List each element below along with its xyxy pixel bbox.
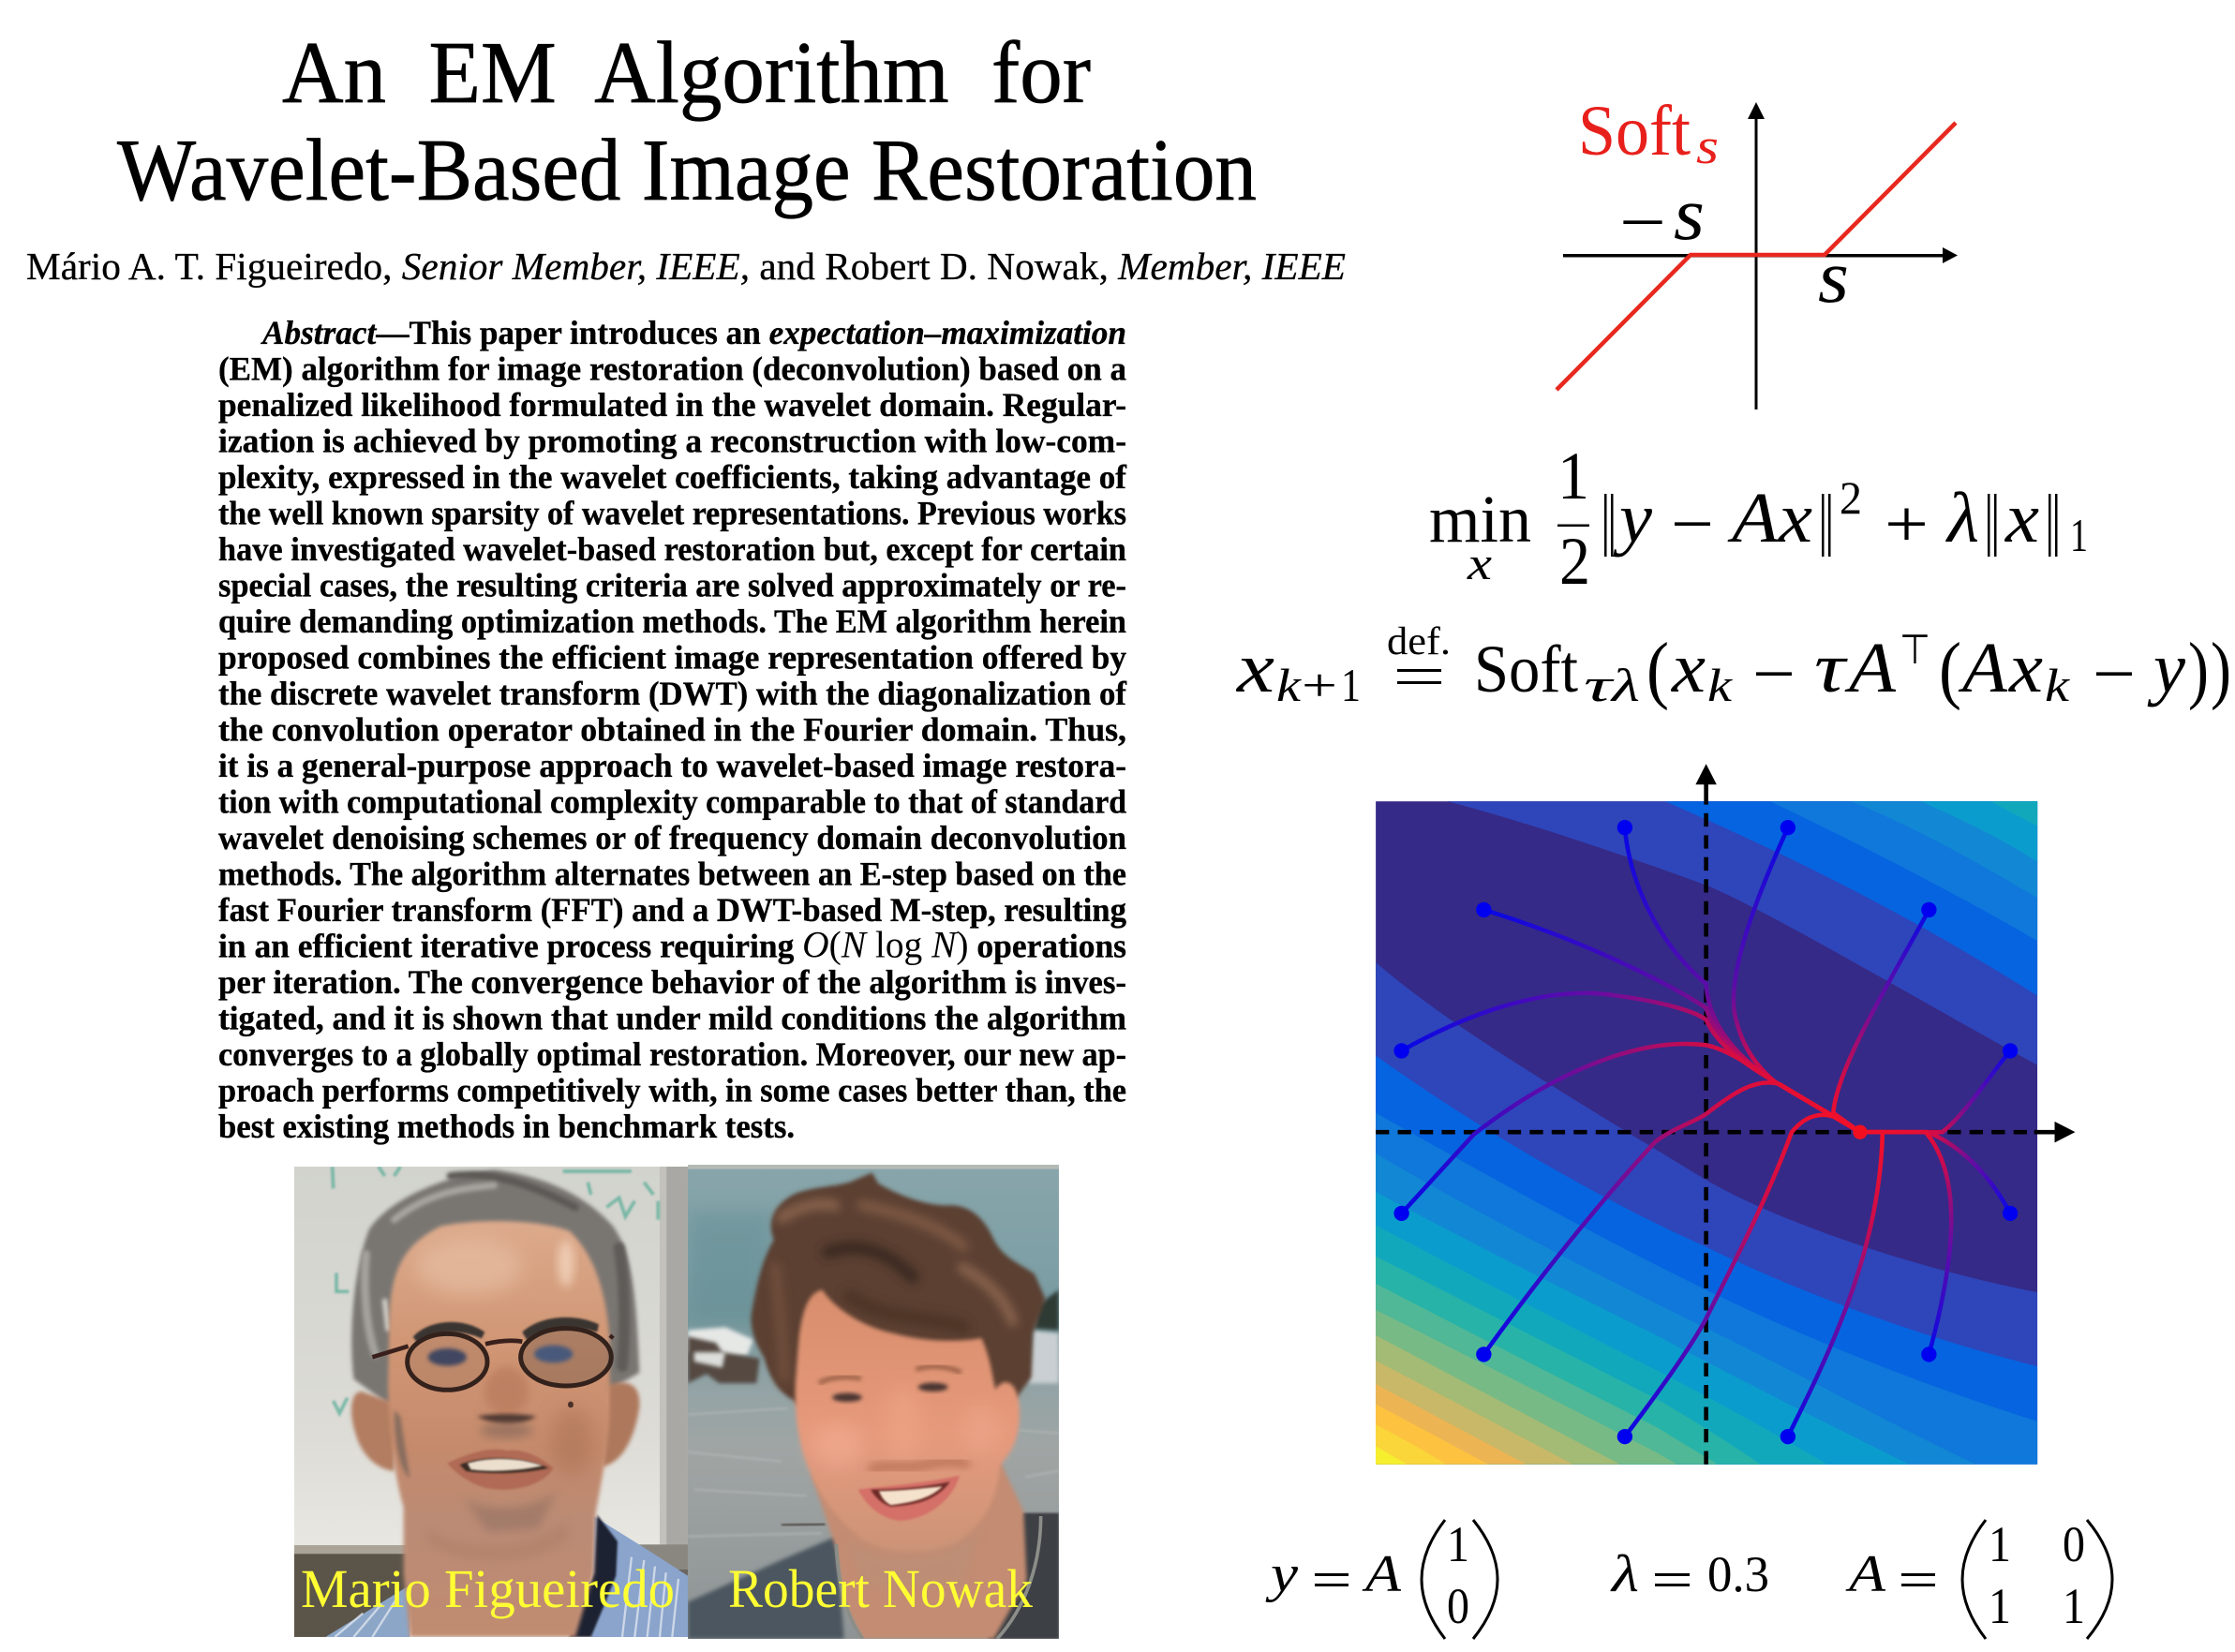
equation: matrix A: A [1844, 1545, 1886, 1603]
abstract text block: wavelet denoising schemes or of frequency domain deconvolution [218, 819, 1126, 856]
solution point [1853, 1125, 1868, 1139]
equation: objective: x [1778, 479, 1812, 558]
abstract text block: the convolution operator obtained in the Fourier domain. Thus, [218, 710, 1126, 748]
abstract text block: quire demanding optimization methods. The EM algorithm herein [218, 603, 1126, 640]
equation: iteration: ( [1939, 627, 1961, 711]
equation: matrix A: 1 [2063, 1578, 2085, 1634]
abstract text block: the discrete wavelet transform (DWT) with the diagonalization of [218, 675, 1127, 712]
equation: y = A (1 0): 1 [1447, 1516, 1469, 1572]
equation: iteration: ( [1646, 627, 1669, 711]
abstract text block: have investigated wavelet-based restoration but, except for certain [218, 530, 1126, 568]
abstract text block: (EM) algorithm for image restoration (deconvolution) based on a [218, 350, 1126, 388]
label: Soft_s: s [1696, 118, 1719, 174]
equation: iteration: λ [1609, 659, 1640, 711]
abstract text block: special cases, the resulting criteria are solved approximately or re- [218, 566, 1126, 603]
equation: matrix A: 1 [1989, 1578, 2011, 1634]
equation: iteration: − [1752, 636, 1795, 711]
equation: lambda = 0.3 [1610, 1545, 1769, 1603]
equation: objective [1429, 439, 2088, 599]
equation: iteration: x [1671, 629, 1706, 707]
equation: objective: − [1671, 486, 1714, 561]
abstract text block: the well known sparsity of wavelet representations. Previous works [218, 495, 1126, 532]
photo: Robert Nowak [688, 1165, 1059, 1639]
dashed horizontal axis [1376, 1122, 2075, 1142]
vertical axis [1748, 102, 1765, 409]
equation: iteration: x [1236, 629, 1274, 707]
equation: objective: min [1429, 482, 1531, 557]
abstract text block: per iteration. The convergence behavior of the algorithm is inves- [218, 963, 1126, 1001]
start points [1393, 820, 2018, 1444]
equation: iteration [1236, 620, 2231, 711]
label: -s: − [1619, 185, 1666, 260]
equation: lambda = 0.3: 0.3 [1707, 1546, 1769, 1602]
abstract text block: converges to a globally optimal restoration. Moreover, our new ap- [218, 1035, 1126, 1073]
equation: iteration: def. [1387, 620, 1451, 663]
label: Robert Nowak: Robert Nowak [728, 1558, 1033, 1619]
abstract text block: Abstract—This paper introduces an expectation–maximization [261, 314, 1126, 351]
equation: objective: + [1885, 486, 1929, 561]
contour map [1376, 801, 2037, 1465]
equation: iteration: k [1707, 659, 1733, 711]
abstract text block: best existing methods in benchmark tests. [218, 1108, 795, 1145]
label: -s [1619, 173, 1705, 260]
contour plot with trajectories [1376, 764, 2075, 1465]
abstract text block: ization is achieved by promoting a reconstruction with low-com- [218, 422, 1126, 459]
abstract text block: it is a general-purpose approach to wavelet-based image restora- [218, 747, 1126, 784]
equation: lambda = 0.3: λ [1610, 1545, 1639, 1603]
red soft threshold curve [1557, 123, 1956, 390]
abstract text block: plexity, expressed in the wavelet coefficients, taking advantage of [218, 458, 1127, 496]
equation: y = A (1 0): A [1362, 1545, 1402, 1603]
equation: objective: 1 [2070, 509, 2088, 561]
equation: iteration: y [2147, 629, 2185, 707]
equation: iteration: Soft [1474, 632, 1578, 707]
equation: y = A (1 0): y [1265, 1545, 1298, 1603]
horizontal axis [1563, 247, 1958, 263]
equation: objective: 2 [1559, 524, 1590, 599]
soft thresholding plot [1557, 92, 1958, 409]
dashed vertical axis [1695, 764, 1717, 1465]
equation: objective: x [1467, 537, 1492, 589]
equation: iteration: 1 [1341, 659, 1361, 711]
equation: objective: 1 [1557, 439, 1589, 513]
equation: objective: 2 [1840, 471, 1862, 524]
label: s: s [1818, 236, 1849, 319]
equation: iteration: k [1276, 659, 1302, 711]
label: Mario Figueiredo: Mario Figueiredo [301, 1558, 675, 1619]
title: An EM Algorithm for [282, 24, 1091, 122]
face and neck [388, 1221, 610, 1637]
equation: iteration: k [2045, 659, 2070, 711]
abstract text block: penalized likelihood formulated in the wavelet domain. Regular- [218, 386, 1126, 424]
equation: y = A (1 0) [1265, 1516, 1497, 1639]
equation: iteration: − [2093, 636, 2136, 711]
title [117, 24, 1257, 219]
label: -s: s [1674, 173, 1705, 256]
equation: iteration: A [1958, 629, 2008, 707]
equation: iteration: A [1844, 629, 1897, 707]
equation: matrix A [1844, 1516, 2112, 1639]
abstract text block: fast Fourier transform (FFT) and a DWT-based M-step, resulting [218, 891, 1126, 929]
equation: iteration: ⊤ [1900, 626, 1930, 674]
equation: iteration: τ [1814, 629, 1848, 707]
equation: iteration: x [2008, 629, 2043, 707]
abstract text block: tion with computational complexity comparable to that of standard [218, 783, 1126, 821]
abstract text block: in an efficient iterative process requiring O(N log N) operations [218, 924, 1126, 965]
abstract text block [218, 314, 1127, 1145]
authors line: Mário A. T. Figueiredo, Senior Member, IEEE, and Robert D. Nowak, Member, IEEE [26, 245, 1346, 288]
equation: iteration: ) [2188, 627, 2209, 711]
equation: objective: x [2004, 479, 2039, 558]
label: Soft_s: Soft [1578, 92, 1691, 171]
abstract text block: methods. The algorithm alternates between an E-step based on the [218, 855, 1126, 892]
equation: iteration: + [1302, 659, 1337, 711]
equation: objective: λ [1945, 479, 1979, 558]
equation: iteration: τ [1584, 659, 1616, 711]
equation: objective: y [1613, 479, 1652, 558]
equation: objective: A [1727, 479, 1780, 558]
abstract text block: proach performs competitively with, in some cases better than, the [218, 1072, 1126, 1109]
title: Wavelet-Based Image Restoration [117, 122, 1257, 219]
equation: y = A (1 0): 0 [1447, 1578, 1469, 1634]
photo: Mario Figueiredo [294, 1167, 688, 1637]
equation: matrix A: 0 [2063, 1516, 2085, 1572]
abstract text block: proposed combines the efficient image representation offered by [218, 639, 1126, 677]
optimisation trajectories [1402, 827, 2010, 1436]
abstract text block: tigated, and it is shown that under mild conditions the algorithm [218, 999, 1126, 1036]
equation: matrix A: 1 [1989, 1516, 2011, 1572]
